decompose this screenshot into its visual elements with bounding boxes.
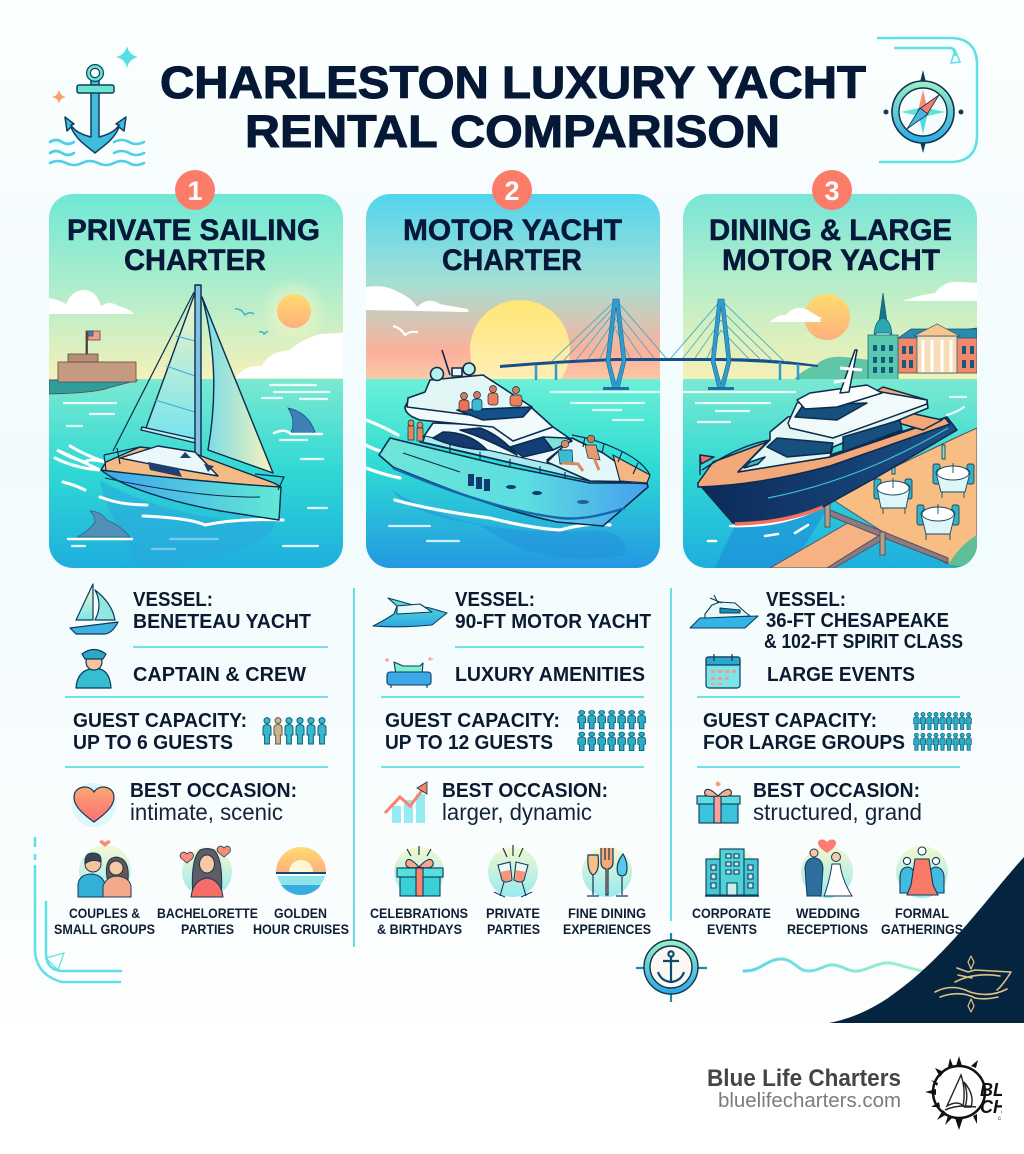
sky bbox=[49, 194, 343, 380]
icon: rising chart bbox=[385, 782, 427, 823]
sea bbox=[49, 379, 343, 568]
column 2: specs bbox=[370, 589, 651, 937]
sparkle teal bbox=[116, 46, 138, 68]
heading: MOTOR YACHT bbox=[403, 214, 622, 247]
heading: MOTOR YACHT bbox=[722, 244, 940, 277]
label: wedding bbox=[787, 905, 868, 937]
icon: fine dining bbox=[582, 847, 632, 897]
boat shadow bbox=[100, 480, 275, 552]
label: private parties bbox=[486, 905, 540, 937]
vessel text: & 102-FT SPIRIT CLASS bbox=[764, 631, 963, 653]
label: wedding: WEDDING bbox=[796, 905, 860, 921]
label: couples: COUPLES & bbox=[69, 905, 140, 921]
vessel text bbox=[764, 589, 963, 653]
best occasion text: larger, dynamic bbox=[442, 799, 592, 825]
vessel text: VESSEL: bbox=[766, 589, 846, 611]
icon: bachelorette bbox=[180, 846, 232, 897]
column 1: specs bbox=[54, 584, 349, 937]
best occasion text: BEST OCCASION: bbox=[130, 780, 297, 802]
cloud bbox=[366, 286, 469, 312]
heading: PRIVATE SAILING bbox=[67, 214, 320, 247]
label: bachelorette: PARTIES bbox=[181, 921, 234, 937]
sky bbox=[683, 194, 977, 380]
number badge 3 bbox=[812, 170, 852, 210]
hill bbox=[793, 357, 870, 380]
label: fine dining: FINE DINING bbox=[568, 905, 646, 921]
icon: heart bbox=[72, 783, 116, 827]
number badge 2 bbox=[492, 170, 532, 210]
birds bbox=[235, 309, 268, 334]
icon: gift bbox=[394, 846, 444, 897]
buildings bbox=[868, 293, 977, 380]
sun bbox=[804, 294, 850, 340]
footer brand text: bluelifecharters.com bbox=[718, 1090, 901, 1112]
guest capacity text bbox=[385, 710, 560, 754]
sailboat bbox=[101, 285, 284, 520]
title bbox=[160, 57, 866, 157]
vessel text: VESSEL: bbox=[133, 589, 213, 611]
icon: corporate building bbox=[705, 847, 759, 897]
navy corner bbox=[829, 857, 1024, 1023]
vessel text: 90-FT MOTOR YACHT bbox=[455, 611, 651, 633]
heading bbox=[403, 214, 622, 277]
vessel text bbox=[455, 589, 651, 633]
guest capacity text bbox=[73, 710, 247, 754]
label: corporate bbox=[692, 905, 771, 937]
guest capacity text: GUEST CAPACITY: bbox=[73, 710, 247, 732]
best occasion text: BEST OCCASION: bbox=[753, 780, 920, 802]
label: golden hour: GOLDEN bbox=[274, 905, 327, 921]
decorative waves bbox=[744, 959, 925, 982]
shark fin bbox=[274, 408, 322, 435]
label: couples bbox=[54, 905, 155, 937]
label: fine dining: EXPERIENCES bbox=[563, 921, 651, 937]
label: couples: SMALL GROUPS bbox=[54, 921, 155, 937]
title: CHARLESTON LUXURY YACHT bbox=[160, 57, 866, 108]
icon: anchor with waves and sparkles bbox=[50, 46, 144, 165]
footer brand text: Blue Life Charters bbox=[707, 1065, 901, 1092]
label: bachelorette bbox=[157, 905, 258, 937]
label: bachelorette: BACHELORETTE bbox=[157, 905, 258, 921]
wake bbox=[366, 420, 610, 530]
label: celebrations: & BIRTHDAYS bbox=[377, 921, 462, 937]
heading: CHARTER bbox=[124, 244, 266, 277]
label: corporate: CORPORATE bbox=[692, 905, 771, 921]
heading: DINING & LARGE bbox=[709, 214, 952, 247]
best occasion text bbox=[442, 780, 608, 825]
icon: couples bbox=[78, 840, 131, 897]
fort bbox=[49, 331, 138, 394]
label: fine dining bbox=[563, 905, 651, 937]
dining tables bbox=[874, 444, 974, 540]
boat shadow bbox=[715, 505, 830, 568]
clouds bbox=[49, 290, 343, 378]
water highlights bbox=[389, 392, 660, 541]
best occasion text: BEST OCCASION: bbox=[442, 780, 608, 802]
building windows bbox=[873, 345, 974, 373]
yacht bbox=[698, 350, 957, 524]
icon: large yacht bbox=[690, 595, 758, 628]
number badge 1 bbox=[175, 170, 215, 210]
icon: captain bbox=[76, 650, 111, 688]
number badge 3: 3 bbox=[824, 176, 840, 206]
icon: compass bbox=[884, 70, 964, 153]
guest capacity text: GUEST CAPACITY: bbox=[385, 710, 560, 732]
heading: CHARTER bbox=[442, 244, 582, 277]
anchor body bbox=[65, 66, 126, 153]
water highlights bbox=[683, 392, 966, 422]
sky bbox=[366, 194, 660, 380]
icon: formal group bbox=[896, 846, 948, 898]
best occasion text: structured, grand bbox=[753, 799, 922, 825]
label: celebrations bbox=[370, 905, 468, 937]
label: private parties: PRIVATE bbox=[486, 905, 540, 921]
icon: motor yacht bbox=[373, 598, 447, 627]
label: golden hour: HOUR CRUISES bbox=[253, 921, 349, 937]
amenities text: LUXURY AMENITIES bbox=[455, 664, 645, 686]
best occasion text bbox=[130, 780, 297, 825]
sea bbox=[683, 379, 977, 568]
heading bbox=[709, 214, 952, 277]
sun bbox=[265, 281, 323, 338]
icon: wedding couple bbox=[801, 839, 853, 898]
icon: toast bbox=[488, 845, 538, 897]
label: formal gatherings bbox=[881, 905, 963, 937]
bird bbox=[393, 326, 418, 335]
label: formal gatherings: GATHERINGS bbox=[881, 921, 963, 937]
guest capacity text: UP TO 12 GUESTS bbox=[385, 732, 553, 754]
best occasion text: intimate, scenic bbox=[130, 799, 283, 825]
icon: gold yacht logo bbox=[935, 956, 1011, 1012]
guest capacity text: UP TO 6 GUESTS bbox=[73, 732, 233, 754]
label: golden hour bbox=[253, 905, 349, 937]
vessel text: 36-FT CHESAPEAKE bbox=[766, 610, 949, 632]
crew text: CAPTAIN & CREW bbox=[133, 664, 306, 686]
vessel text bbox=[133, 589, 311, 633]
sparkle orange bbox=[52, 89, 66, 104]
bridge spanning panels 2 and 3 bbox=[500, 299, 818, 390]
dolphin bbox=[68, 511, 132, 539]
wake bbox=[55, 446, 283, 525]
title: RENTAL COMPARISON bbox=[245, 106, 780, 157]
vessel text: BENETEAU YACHT bbox=[133, 611, 311, 633]
boat shadow bbox=[392, 490, 626, 559]
number badge 1: 1 bbox=[187, 176, 203, 206]
icon: twelve guests bbox=[578, 710, 645, 751]
icon: sofa bbox=[385, 657, 433, 688]
label: wedding: RECEPTIONS bbox=[787, 921, 868, 937]
panel: private sailing charter bbox=[49, 194, 343, 568]
icon: six guests bbox=[263, 718, 326, 744]
guest capacity text bbox=[703, 710, 905, 754]
best occasion text bbox=[753, 780, 922, 825]
vessel text: VESSEL: bbox=[455, 589, 535, 611]
yacht bbox=[379, 350, 650, 526]
people on boat bbox=[408, 386, 600, 471]
waves bbox=[50, 140, 144, 165]
icon: many guests bbox=[914, 712, 971, 750]
icon: sailboat bbox=[70, 584, 118, 634]
icon: sunset bbox=[276, 847, 326, 895]
icon: gift box bbox=[697, 781, 740, 823]
heading bbox=[67, 214, 320, 277]
guest capacity text: FOR LARGE GROUPS bbox=[703, 732, 905, 754]
icon: anchor emblem bbox=[636, 933, 707, 1002]
number badge 2: 2 bbox=[504, 176, 520, 206]
column dividers bbox=[354, 588, 671, 947]
label: private parties: PARTIES bbox=[487, 921, 540, 937]
label: corporate: EVENTS bbox=[707, 921, 757, 937]
guest capacity text: GUEST CAPACITY: bbox=[703, 710, 877, 732]
label: formal gatherings: FORMAL bbox=[895, 905, 949, 921]
events text: LARGE EVENTS bbox=[767, 664, 915, 686]
column 3: specs bbox=[690, 589, 971, 937]
panel: motor yacht charter bbox=[366, 194, 660, 568]
water highlights bbox=[64, 385, 329, 549]
dock bbox=[770, 428, 977, 568]
sea bbox=[366, 379, 660, 568]
icon: calendar bbox=[706, 654, 740, 688]
footer brand text bbox=[707, 1065, 901, 1112]
panel: dining and large motor yacht bbox=[683, 194, 977, 568]
decorative frame: bottom left bbox=[35, 838, 121, 982]
clouds bbox=[770, 282, 977, 322]
footer logo bbox=[925, 1056, 1002, 1130]
decorative frame: top right bbox=[878, 38, 977, 162]
label: celebrations: CELEBRATIONS bbox=[370, 905, 468, 921]
footer logo: c bbox=[998, 1116, 1001, 1122]
sun bbox=[470, 300, 570, 379]
